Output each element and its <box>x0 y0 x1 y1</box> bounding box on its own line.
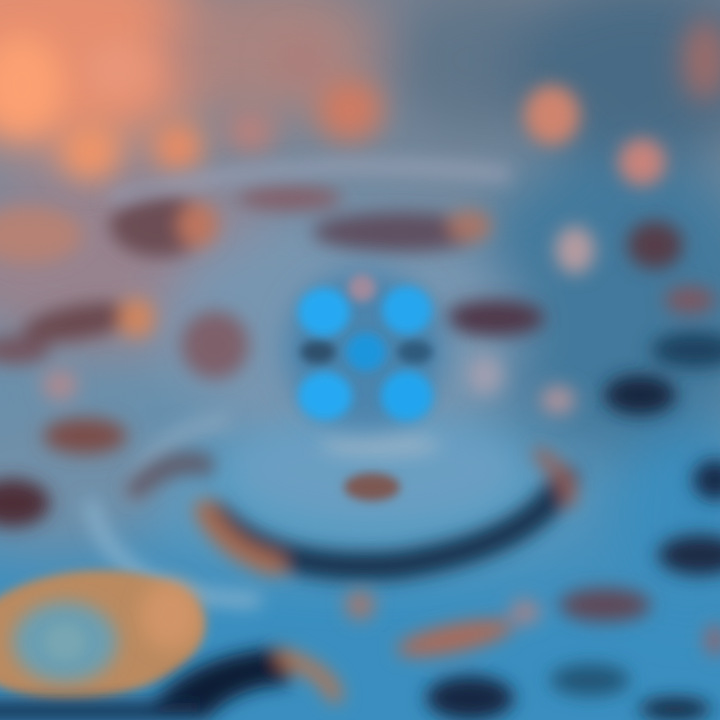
bottom dark arc <box>0 648 335 720</box>
icon: central blue four-petal logo <box>285 270 445 430</box>
light ring strokes <box>90 167 510 600</box>
brown rings, left and centre <box>0 185 492 527</box>
icon: orange coin, bottom left <box>0 559 211 711</box>
upper orange glows <box>0 18 720 180</box>
central platform <box>241 428 512 520</box>
central dark ring <box>135 455 570 566</box>
bottom right rings <box>345 588 720 720</box>
right side spots <box>445 85 720 575</box>
